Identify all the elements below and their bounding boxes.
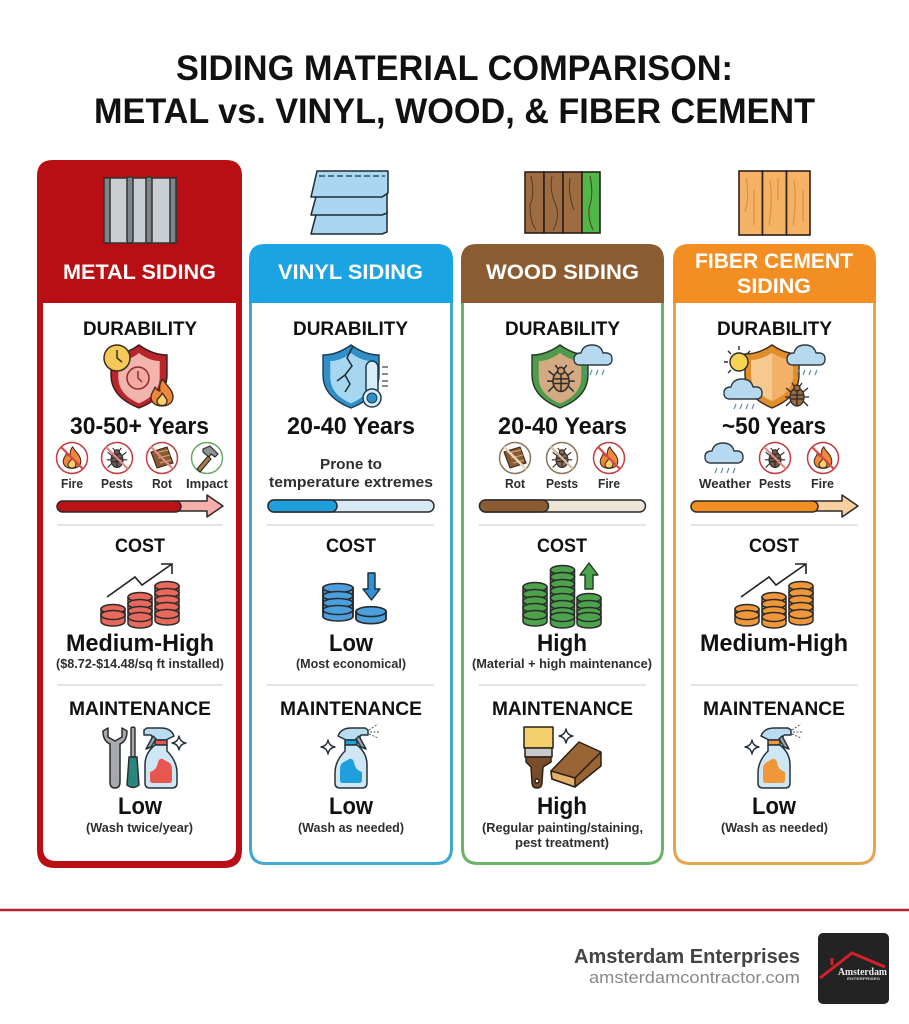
heading: fiber cement siding: SIDING <box>737 275 811 298</box>
card header: wood <box>461 244 664 303</box>
heading: fiber cement siding: FIBER CEMENT <box>695 250 853 273</box>
heading: maintenance: MAINTENANCE <box>492 698 633 720</box>
icon: paint brush and sponge <box>524 727 601 788</box>
heading: durability: DURABILITY <box>83 318 197 340</box>
value: metal cost: Medium-High <box>66 630 214 657</box>
heading: cost: COST <box>749 535 799 557</box>
icon: no pests <box>102 442 132 474</box>
icon: no fire <box>56 442 88 474</box>
heading: maintenance: MAINTENANCE <box>69 698 211 720</box>
value: wood cost: High <box>537 630 587 657</box>
resistance labels: wood: Rot <box>505 477 526 491</box>
progress arrow: fiber <box>691 495 858 517</box>
note: temperature: Prone to <box>320 457 382 473</box>
value: vinyl durability: 20-40 Years <box>287 413 415 440</box>
panel: metal siding <box>37 160 242 868</box>
value: vinyl maintenance: Low <box>329 793 373 820</box>
icon: shield sun clouds bug <box>724 345 825 409</box>
heading: wood siding: WOOD SIDING <box>486 261 639 284</box>
panel: wood siding <box>461 172 664 864</box>
resistance labels: metal: Impact <box>186 477 229 491</box>
footer: logo: ENTERPRISES <box>847 976 880 981</box>
icon: rising coins <box>101 564 179 628</box>
resistance labels: fiber <box>699 477 834 491</box>
progress bar: wood <box>480 500 646 512</box>
card frame: metal <box>37 160 242 868</box>
note: metal maintenance: (Wash twice/year) <box>86 820 193 835</box>
note: vinyl cost: (Most economical) <box>296 656 406 671</box>
value: metal maintenance: Low <box>118 793 162 820</box>
resistance labels: metal <box>61 477 229 491</box>
value: fiber durability: ~50 Years <box>722 413 826 440</box>
icon: vinyl slats <box>311 171 388 234</box>
heading: fiber cement siding <box>695 250 853 298</box>
resistance labels: fiber: Fire <box>811 477 834 491</box>
resistance labels: metal: Rot <box>152 477 173 491</box>
resistance labels: wood: Pests <box>546 477 578 491</box>
card header: fiber cement <box>673 244 876 303</box>
icon: no pests <box>760 442 790 474</box>
value: vinyl cost: Low <box>329 630 373 657</box>
icon: no fire <box>808 442 838 474</box>
note: wood maintenance <box>482 820 643 850</box>
note: temperature <box>269 457 433 491</box>
panel: fiber cement siding <box>673 171 876 864</box>
icon: shield termite cloud <box>532 345 612 408</box>
panel: vinyl siding <box>249 171 453 865</box>
note: vinyl maintenance: (Wash as needed) <box>298 820 404 835</box>
note: wood cost: (Material + high maintenance) <box>472 656 652 671</box>
heading: durability: DURABILITY <box>717 318 832 340</box>
resistance labels: metal: Pests <box>101 477 133 491</box>
heading: metal siding: METAL SIDING <box>63 261 216 284</box>
note: fiber maintenance: (Wash as needed) <box>721 820 828 835</box>
icon: impact hammer <box>192 442 222 474</box>
card body: metal <box>43 303 236 861</box>
icon: spray bottle <box>321 724 380 788</box>
resistance labels: metal: Fire <box>61 477 83 491</box>
value: wood durability: 20-40 Years <box>498 413 627 440</box>
value: fiber maintenance: Low <box>752 793 796 820</box>
icon: cracked shield thermometer <box>323 345 388 408</box>
note: metal cost: ($8.72-$14.48/sq ft installed) <box>56 656 224 671</box>
footer: company name <box>574 946 800 987</box>
heading: maintenance: MAINTENANCE <box>280 698 422 720</box>
title <box>94 49 815 131</box>
heading: maintenance: MAINTENANCE <box>703 698 845 720</box>
icon: no fire <box>594 442 624 474</box>
icon: rising coins <box>735 564 813 628</box>
value: metal durability: 30-50+ Years <box>70 413 209 440</box>
icon: wrench screwdriver spray <box>103 727 186 788</box>
card header: vinyl <box>249 244 453 303</box>
icon: fiber cement planks <box>739 171 810 235</box>
heading: durability: DURABILITY <box>293 318 408 340</box>
footer: logo: Amsterdam <box>838 966 887 978</box>
title: SIDING MATERIAL COMPARISON: <box>176 49 733 88</box>
icon: spray bottle <box>745 724 803 788</box>
heading: durability: DURABILITY <box>505 318 620 340</box>
note: temperature: temperature extremes <box>269 475 433 491</box>
icon: weather cloud <box>705 443 743 473</box>
icon: no rot <box>500 442 530 474</box>
footer: logo <box>818 933 889 1004</box>
card frame: wood <box>462 303 662 864</box>
heading: cost: COST <box>115 535 165 557</box>
icon: metal panel <box>104 177 176 243</box>
heading: vinyl siding: VINYL SIDING <box>278 261 423 284</box>
footer: company name: amsterdamcontractor.com <box>589 968 800 987</box>
icon: shield clock fire <box>104 345 173 408</box>
icon: no pests <box>546 442 578 474</box>
title: METAL vs. VINYL, WOOD, & FIBER CEMENT <box>94 92 815 131</box>
resistance labels: wood: Fire <box>598 477 620 491</box>
resistance labels: wood <box>505 477 620 491</box>
note: wood maintenance: pest treatment) <box>515 835 609 850</box>
heading: cost: COST <box>537 535 587 557</box>
resistance labels: fiber: Pests <box>759 477 791 491</box>
card frame: vinyl <box>249 244 453 865</box>
resistance labels: fiber: Weather <box>699 477 751 491</box>
icon: no rot <box>146 442 178 474</box>
heading: cost: COST <box>326 535 376 557</box>
icon: wood planks <box>525 172 600 233</box>
progress arrow: metal <box>57 495 223 517</box>
progress bar: vinyl <box>268 500 434 512</box>
value: wood maintenance: High <box>537 793 587 820</box>
footer: company name: Amsterdam Enterprises <box>574 946 800 968</box>
card frame: fiber cement <box>674 303 874 864</box>
value: fiber cost: Medium-High <box>700 630 848 657</box>
icon: high coins <box>523 563 601 628</box>
icon: falling coins <box>323 573 386 624</box>
note: wood maintenance: (Regular painting/staining, <box>482 820 643 835</box>
